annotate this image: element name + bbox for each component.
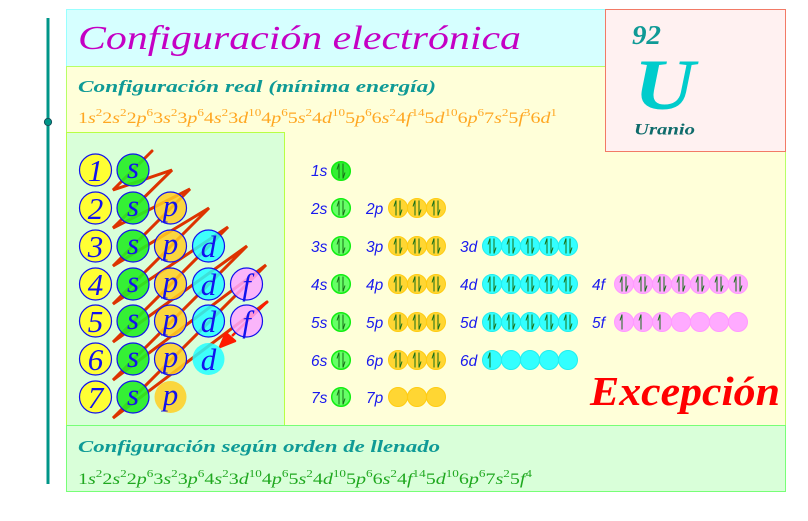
- panel: element card: [606, 10, 786, 152]
- orbital diagram: s orbitals: 7s: [311, 390, 328, 407]
- real electron configuration: 2: [389, 108, 396, 119]
- filling order electron configuration: 2: [503, 469, 510, 480]
- real electron configuration: 6: [372, 110, 382, 127]
- real electron configuration: p: [270, 110, 281, 127]
- filling order electron configuration: 2: [171, 469, 178, 480]
- d subshell column: [192, 229, 224, 377]
- orbital diagram: f orbitals: 5f: [592, 315, 607, 332]
- atomic number: 92: [632, 20, 661, 50]
- filling order electron configuration: s: [383, 471, 390, 488]
- filling order electron configuration: 2: [306, 469, 313, 480]
- real electron configuration: 5: [345, 110, 355, 127]
- orbital diagram: p orbitals: 2p: [365, 201, 384, 218]
- real electron configuration: s: [112, 110, 120, 127]
- p subshell column: p: [161, 377, 178, 412]
- real electron configuration: 6: [478, 108, 484, 119]
- real electron configuration: 10: [332, 108, 345, 119]
- orbital diagram: d orbitals: 4d: [460, 277, 479, 294]
- filling order electron configuration: 3: [153, 471, 163, 488]
- orbital diagram: p orbitals: 3p: [366, 239, 384, 256]
- filling order electron configuration: p: [355, 471, 366, 488]
- level numbers column: [80, 153, 112, 415]
- real electron configuration: 6: [281, 108, 288, 119]
- filling order electron configuration: 2: [127, 471, 137, 488]
- real electron configuration: 5: [508, 110, 518, 127]
- real electron configuration: s: [214, 110, 222, 127]
- real electron configuration: 3: [153, 110, 163, 127]
- filling order electron configuration: d: [239, 471, 250, 488]
- level numbers column: 7: [88, 380, 105, 415]
- filling order electron configuration: 14: [413, 469, 427, 480]
- real electron configuration: f: [518, 110, 527, 127]
- element symbol: U: [634, 45, 700, 125]
- filling order electron configuration: 5: [510, 471, 520, 488]
- panel: filling order configuration: [66, 426, 786, 492]
- real electron configuration: s: [163, 110, 171, 127]
- real electron configuration: f: [406, 110, 415, 127]
- real electron configuration: d: [238, 110, 249, 127]
- d subshell column: d: [201, 304, 217, 339]
- orbital diagram: s orbitals: 2s: [310, 201, 328, 218]
- filling order electron configuration: 4: [525, 469, 533, 480]
- level numbers column: 2: [88, 191, 103, 226]
- real electron configuration: 3: [524, 108, 530, 119]
- filling order electron configuration: 4: [262, 471, 272, 488]
- real electron configuration: 1s: [78, 110, 94, 127]
- filling order electron configuration: 6: [459, 471, 469, 488]
- real electron configuration: 2: [306, 108, 312, 119]
- real electron configuration: 4: [204, 110, 214, 127]
- real electron configuration: 2: [120, 108, 127, 119]
- real electron configuration: 2: [171, 108, 177, 119]
- orbital diagram: s orbitals: 6s: [311, 353, 328, 370]
- real electron configuration: s: [298, 110, 306, 127]
- real electron configuration: p: [354, 110, 365, 127]
- orbital diagram: d orbitals: 3d: [460, 239, 479, 256]
- orbital diagram: d orbitals: 6d: [460, 353, 479, 370]
- real electron configuration: p: [186, 110, 197, 127]
- filling order electron configuration: 6: [366, 469, 373, 480]
- panel: real configuration background: [66, 66, 786, 426]
- p subshell column: p: [161, 301, 178, 336]
- filling order electron configuration: 1s: [78, 471, 94, 488]
- heading: filling order: Configuración según orden de llenado: [78, 437, 440, 456]
- s subshell column: [117, 150, 149, 413]
- filling order electron configuration: d: [323, 471, 334, 488]
- filling order electron configuration: p: [136, 471, 147, 488]
- real electron configuration: d: [435, 110, 446, 127]
- filling order electron configuration: s: [112, 471, 120, 488]
- panel: filling order diagram: [66, 132, 284, 426]
- filling order electron configuration: 10: [333, 469, 346, 480]
- filling order electron configuration: 5: [346, 471, 356, 488]
- filling order electron configuration: 4: [313, 471, 323, 488]
- s subshell column: s: [127, 301, 139, 336]
- d subshell column: d: [201, 267, 217, 302]
- real electron configuration: d: [322, 110, 333, 127]
- filling order electron configuration: p: [271, 471, 282, 488]
- s subshell column: s: [127, 150, 139, 185]
- filling order electron configuration: s: [298, 471, 306, 488]
- slider handle: [44, 118, 52, 126]
- real electron configuration: 7: [484, 110, 494, 127]
- filling order electron configuration: p: [468, 471, 479, 488]
- real electron configuration: 2: [127, 110, 137, 127]
- f subshell column: f: [242, 267, 255, 302]
- real electron configuration: 10: [248, 108, 261, 119]
- filling order electron configuration: 6: [282, 469, 288, 480]
- real electron configuration: 2: [502, 108, 508, 119]
- real electron configuration: 3: [177, 110, 187, 127]
- p subshell column: p: [161, 264, 178, 299]
- s subshell column: s: [127, 377, 139, 412]
- real electron configuration: 10: [445, 108, 458, 119]
- s subshell column: s: [127, 339, 139, 374]
- s subshell column: s: [127, 226, 139, 261]
- element name: Uranio: [634, 122, 695, 138]
- filling order electron configuration: 6: [479, 469, 485, 480]
- slider bar: [44, 18, 52, 484]
- real electron configuration: 6: [458, 110, 468, 127]
- filling order electron configuration: p: [186, 471, 198, 488]
- filling order electron configuration: 2: [120, 469, 127, 480]
- p subshell column: p: [161, 188, 178, 223]
- real electron configuration: 4: [261, 110, 271, 127]
- real electron configuration: 4: [312, 110, 322, 127]
- filling order zigzag arrow: [113, 151, 267, 418]
- orbital diagram: s orbitals: 5s: [311, 315, 328, 332]
- orbital diagram: p orbitals: 6p: [366, 353, 384, 370]
- orbital diagram: p orbitals: 7p: [366, 390, 384, 407]
- orbital diagram: d orbitals: 5d: [460, 315, 479, 332]
- filling order electron configuration: 5: [288, 471, 298, 488]
- real electron configuration: 1: [550, 108, 557, 119]
- orbital diagram: s orbitals: 4s: [311, 277, 328, 294]
- p subshell column: [154, 188, 186, 413]
- real electron configuration: 2: [222, 108, 228, 119]
- orbital diagram: p orbitals: [365, 198, 446, 407]
- orbital diagram: s orbitals: 3s: [311, 239, 328, 256]
- p subshell column: p: [161, 226, 178, 261]
- real electron configuration: 5: [288, 110, 298, 127]
- real electron configuration: 2: [96, 108, 102, 119]
- s subshell column: s: [127, 188, 139, 223]
- filling order electron configuration: 5: [426, 471, 436, 488]
- real electron configuration: d: [540, 110, 552, 127]
- real electron configuration: p: [135, 110, 147, 127]
- filling order electron configuration: 2: [102, 471, 112, 488]
- filling order electron configuration: s: [214, 471, 222, 488]
- filling order electron configuration: f: [520, 471, 529, 488]
- orbital diagram: s orbitals: [310, 162, 350, 407]
- level numbers column: 3: [87, 229, 103, 264]
- f subshell column: f: [242, 304, 255, 339]
- exception label: Excepción: [589, 368, 780, 414]
- orbital diagram: p orbitals: 4p: [366, 277, 384, 294]
- real electron configuration: s: [382, 110, 389, 127]
- real electron configuration: p: [466, 110, 478, 127]
- filling order electron configuration: s: [495, 471, 503, 488]
- p subshell column: p: [161, 339, 178, 374]
- panel: title band: [66, 10, 606, 66]
- filling order electron configuration: 6: [147, 469, 153, 480]
- filling order electron configuration: s: [163, 471, 171, 488]
- real electron configuration: 2: [102, 110, 112, 127]
- filling order electron configuration: 2: [222, 469, 229, 480]
- level numbers column: 4: [88, 267, 103, 302]
- filling order electron configuration: 4: [397, 471, 407, 488]
- real electron configuration: 6: [530, 110, 540, 127]
- level numbers column: 5: [88, 304, 103, 339]
- real electron configuration: 6: [147, 108, 153, 119]
- real electron configuration: 14: [411, 108, 425, 119]
- real electron configuration: s: [494, 110, 502, 127]
- filling order electron configuration: 7: [485, 471, 495, 488]
- filling order electron configuration: 10: [249, 469, 262, 480]
- filling order electron configuration: 6: [373, 471, 383, 488]
- filling order electron configuration: 10: [446, 469, 459, 480]
- filling order electron configuration: 2: [390, 469, 397, 480]
- real electron configuration: 4: [396, 110, 406, 127]
- real electron configuration: 6: [197, 108, 204, 119]
- orbital diagram: s orbitals: 1s: [311, 163, 328, 180]
- orbital diagram: p orbitals: 5p: [366, 315, 384, 332]
- title: Configuración electrónica: [78, 20, 521, 57]
- orbital diagram: d orbitals: [460, 236, 578, 370]
- filling order electron configuration: 3: [178, 471, 188, 488]
- filling order electron configuration: 3: [229, 471, 239, 488]
- s subshell column: s: [127, 264, 139, 299]
- filling order electron configuration: 2: [96, 469, 102, 480]
- heading: real configuration: Configuración real (mínima energía): [78, 77, 436, 96]
- orbital diagram: f orbitals: 4f: [592, 277, 607, 294]
- filling order electron configuration: f: [407, 471, 416, 488]
- real electron configuration: 3: [228, 110, 238, 127]
- d subshell column: d: [201, 342, 217, 377]
- filling order electron configuration: d: [436, 471, 447, 488]
- filling order electron configuration: 6: [198, 469, 204, 480]
- f subshell column: [230, 267, 262, 339]
- orbital diagram: f orbitals: [592, 274, 748, 332]
- d subshell column: d: [201, 229, 217, 264]
- filling order electron configuration: 4: [204, 471, 214, 488]
- level numbers column: 1: [88, 153, 103, 188]
- real electron configuration: 5: [425, 110, 435, 127]
- level numbers column: 6: [88, 342, 104, 377]
- red arrow head: [220, 302, 267, 347]
- real electron configuration: 6: [365, 108, 372, 119]
